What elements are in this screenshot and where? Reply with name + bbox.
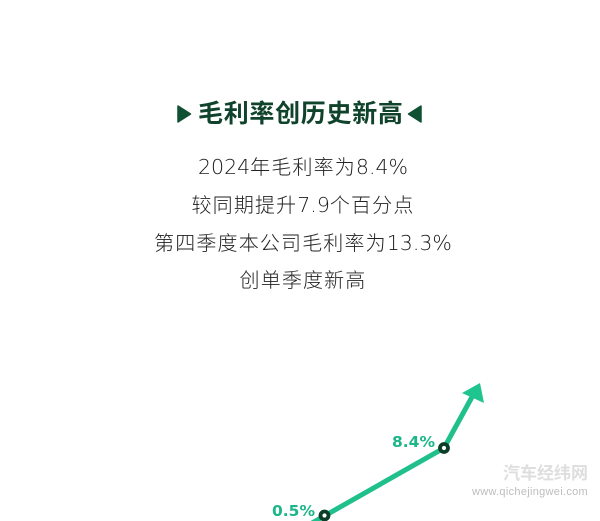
data point: 8.4%: 8.4%: [392, 433, 435, 451]
icon: right triangle marker: [408, 105, 422, 123]
watermark: [472, 464, 588, 498]
heading: 毛利率创历史新高: [198, 100, 404, 128]
text block: gross margin description: [154, 155, 452, 292]
text block: gross margin description: 创单季度新高: [240, 270, 366, 292]
watermark: 汽车经纬网: [503, 464, 588, 483]
text block: gross margin description: 第四季度本公司毛利率为13.3%: [154, 231, 452, 255]
data point: 0.5%: 0.5%: [272, 502, 315, 520]
title with markers: [177, 100, 422, 128]
trend arrow: [312, 383, 484, 521]
text block: gross margin description: 2024年毛利率为8.4%: [198, 155, 408, 179]
text block: gross margin description: 较同期提升7.9个百分点: [192, 193, 414, 217]
watermark: www.qichejingwei.com: [472, 486, 588, 498]
icon: left triangle marker: [177, 105, 192, 123]
